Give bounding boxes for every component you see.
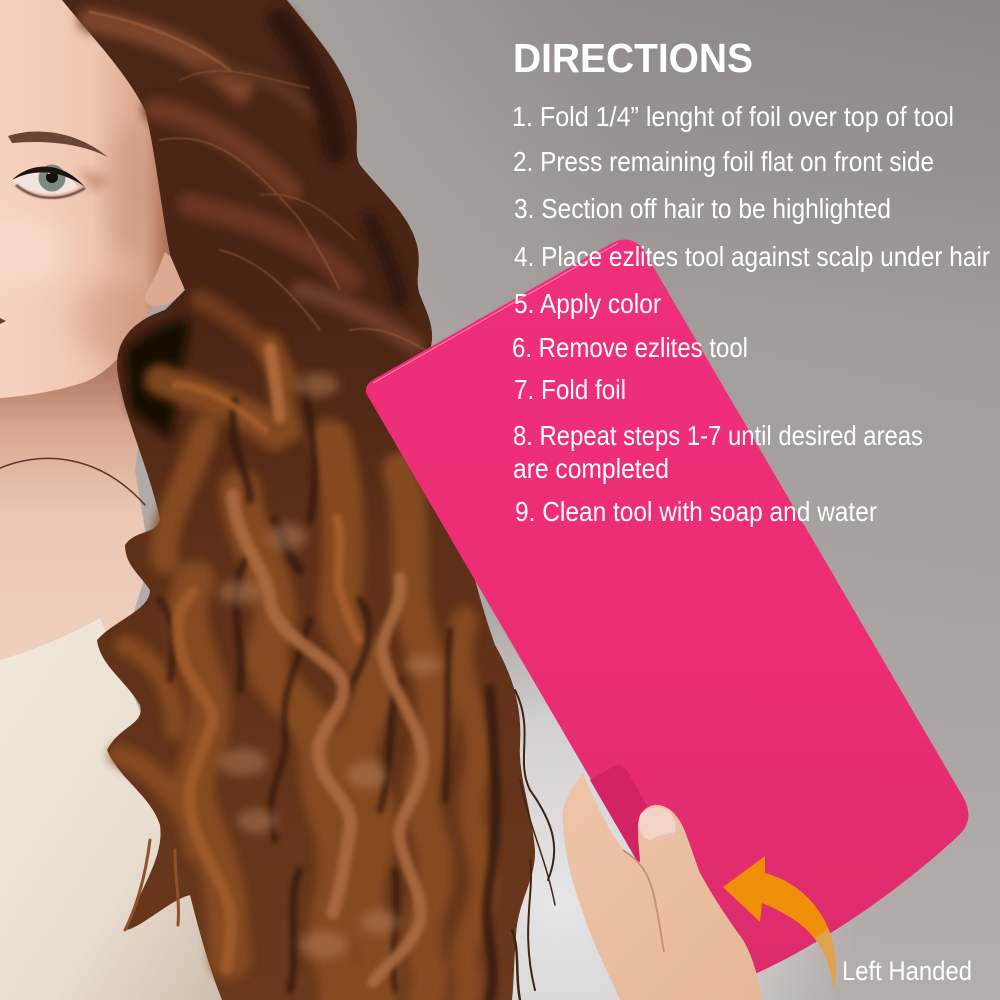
woman: ear — [145, 252, 183, 306]
hair wisps on the right — [512, 690, 555, 1000]
hair mass — [62, 0, 535, 1000]
step 7: 7. Fold foil — [514, 374, 626, 405]
woman: nose hint — [0, 318, 6, 324]
step 2: 2. Press remaining foil flat on front side — [513, 146, 934, 177]
hair dark creases — [160, 380, 496, 1000]
step 3: 3. Section off hair to be highlighted — [514, 193, 891, 224]
top hair warm sweep — [90, 20, 415, 380]
step 9: 9. Clean tool with soap and water — [515, 496, 877, 527]
hair — [0, 0, 555, 1000]
top hair fine strands — [90, 12, 425, 350]
woman: face — [0, 0, 170, 398]
pink ezlites tool — [366, 240, 968, 973]
step 1: 1. Fold 1/4” lenght of foil over top of tool — [512, 101, 954, 132]
woman: blouse — [0, 618, 235, 1000]
step 6: 6. Remove ezlites tool — [512, 332, 748, 363]
hand holding tool — [562, 773, 762, 1000]
step 8: 8. Repeat steps 1-7 until desired areas — [513, 420, 923, 451]
hair black shadow behind ear — [125, 320, 190, 440]
woman: neck and chest — [0, 360, 150, 665]
step 8: are completed — [513, 453, 669, 484]
step 8 — [513, 420, 923, 484]
orange curved arrow — [723, 856, 836, 990]
step 5: 5. Apply color — [514, 288, 661, 319]
hair wisps on the neck and blouse — [0, 458, 178, 930]
hair bright ribbons — [175, 349, 423, 982]
hair broad curl lobes — [120, 345, 483, 1000]
directions list — [512, 101, 990, 527]
tool thumb notch — [590, 765, 652, 866]
heading: DIRECTIONS — [513, 35, 753, 81]
hair glossy highlights — [218, 373, 441, 959]
woman: eye and brow — [8, 131, 112, 198]
label: left handed: Left Handed — [842, 956, 972, 986]
